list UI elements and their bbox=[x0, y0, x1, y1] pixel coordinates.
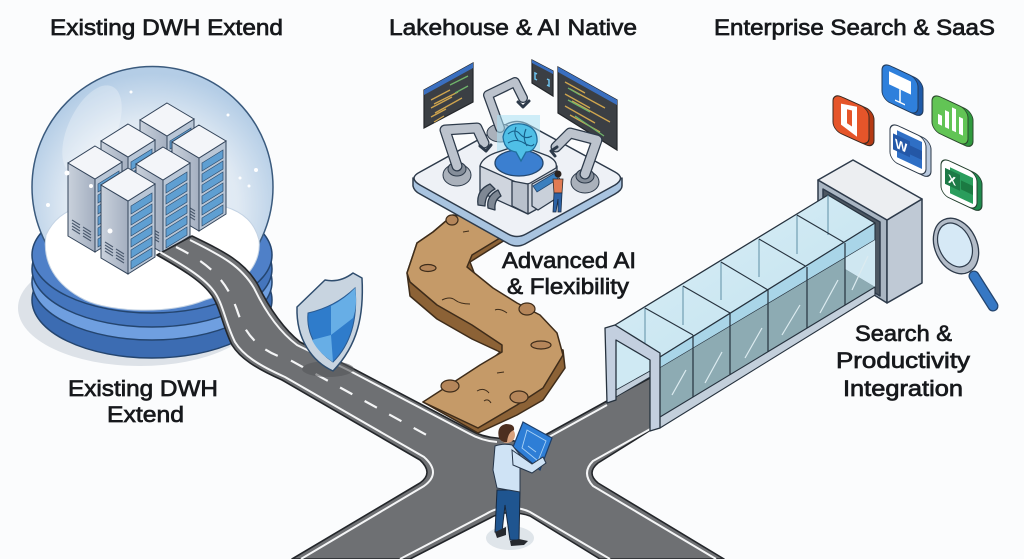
ground shadow bbox=[486, 526, 534, 550]
torso bbox=[493, 444, 520, 492]
robot arm back bbox=[487, 82, 529, 142]
globe base bbox=[18, 197, 272, 366]
label: Existing DWH Extend: Extend bbox=[107, 402, 184, 427]
label: Search and Productivity Integration: Integration bbox=[843, 376, 963, 401]
platform top bbox=[414, 122, 620, 236]
label: Advanced AI and Flexibility bbox=[502, 248, 636, 299]
entrance sill bbox=[616, 371, 650, 397]
code screen left bbox=[424, 63, 473, 128]
crossroads road network bbox=[157, 236, 724, 559]
entrance opening bbox=[616, 340, 650, 392]
dirt side bbox=[407, 215, 565, 433]
person reading blueprint bbox=[486, 422, 552, 550]
hologram beam bbox=[497, 115, 540, 165]
dirt path bbox=[407, 215, 565, 433]
label: Search and Productivity Integration bbox=[836, 321, 970, 401]
corridor floor bbox=[845, 269, 875, 305]
icon: office bbox=[833, 93, 874, 148]
shield face bbox=[308, 288, 356, 362]
title: Enterprise Search and SaaS: Enterprise Search & SaaS bbox=[714, 15, 995, 40]
console screen bbox=[533, 173, 558, 192]
technician bbox=[553, 170, 563, 212]
road edge lines bbox=[160, 240, 716, 559]
entrance frame bbox=[605, 325, 660, 431]
server racks bbox=[68, 103, 226, 274]
blue disc bbox=[495, 150, 543, 176]
corridor sill bbox=[660, 287, 875, 428]
central machine bbox=[478, 145, 557, 214]
icon: excel bbox=[941, 157, 982, 213]
title: Lakehouse and AI Native: Lakehouse & AI Native bbox=[389, 15, 637, 40]
icon: word bbox=[890, 122, 931, 179]
rear wall see-through bbox=[645, 195, 828, 348]
shadow on road bbox=[302, 361, 354, 377]
highlight on glass bbox=[50, 76, 134, 184]
dirt surface bbox=[407, 215, 563, 428]
arm bbox=[512, 450, 546, 473]
shield body bbox=[297, 273, 362, 371]
road surface bbox=[157, 236, 724, 559]
console bbox=[532, 171, 560, 210]
code screen right bbox=[558, 67, 617, 150]
corridor roof bbox=[615, 195, 875, 357]
icon: green chart bbox=[932, 93, 973, 149]
title: Existing DWH Extend: Existing DWH Extend bbox=[50, 15, 283, 40]
label: Existing DWH Extend: Existing DWH bbox=[68, 376, 218, 401]
label: Search and Productivity Integration: Productivity bbox=[836, 348, 970, 373]
end panel bbox=[845, 240, 875, 287]
icon: magnifier bbox=[925, 211, 993, 306]
front panel dividers bbox=[693, 243, 845, 397]
app icons bbox=[833, 62, 993, 306]
glass dome bbox=[32, 66, 273, 308]
robot arm left bbox=[443, 128, 491, 186]
label: Advanced AI and Flexibility: Advanced AI bbox=[502, 248, 636, 273]
front glass lower bbox=[660, 258, 845, 417]
ground cracks bbox=[442, 231, 507, 403]
platform slab bbox=[413, 178, 622, 246]
snowflakes bbox=[46, 90, 258, 286]
snow mound bbox=[45, 200, 259, 310]
icon: presentation bbox=[882, 62, 923, 118]
label: Search and Productivity Integration: Search & bbox=[855, 321, 952, 346]
glass reflections bbox=[672, 256, 868, 395]
road centre dashes bbox=[176, 247, 432, 438]
icon: excel: X bbox=[948, 172, 957, 189]
label: Advanced AI and Flexibility: & Flexibility bbox=[507, 274, 629, 299]
gateway block bbox=[818, 160, 922, 303]
blueprint bbox=[513, 422, 552, 470]
head bbox=[499, 427, 515, 443]
small brace screen bbox=[532, 60, 553, 96]
front glass upper bbox=[660, 223, 875, 368]
shield light quarters bbox=[312, 288, 356, 362]
roof panel ribs bbox=[645, 215, 845, 335]
label: Existing DWH Extend bbox=[68, 376, 218, 427]
rocks bbox=[420, 215, 551, 403]
robot arm right bbox=[551, 133, 599, 193]
legs bbox=[495, 490, 520, 540]
hair bbox=[498, 424, 514, 442]
glowing brain bbox=[503, 124, 537, 161]
AI platform bbox=[413, 60, 622, 246]
glass corridor bbox=[605, 160, 922, 431]
icon: word: W bbox=[895, 136, 907, 156]
snow globe with servers bbox=[18, 66, 273, 366]
shield icon bbox=[297, 273, 362, 377]
shoes bbox=[495, 527, 528, 546]
